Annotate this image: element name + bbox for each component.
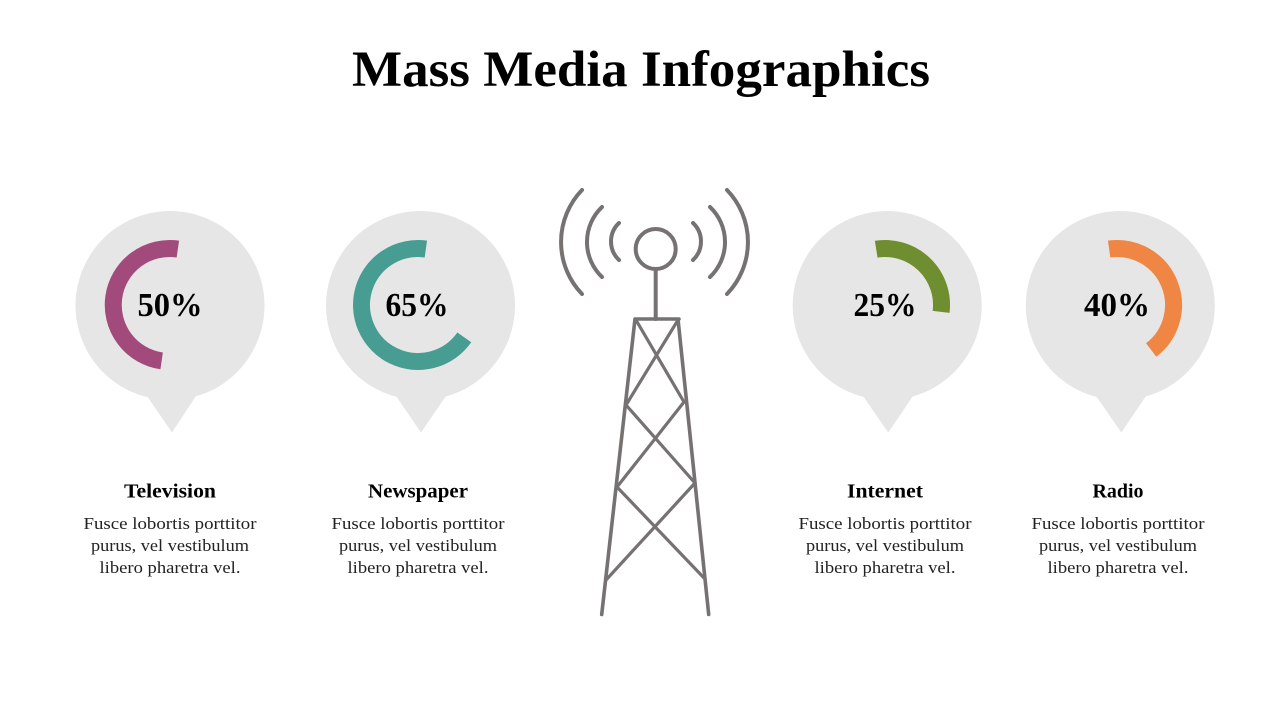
antenna mast — [654, 269, 658, 319]
pin: newspaper — [326, 211, 515, 432]
description: newspaper: purus, vel vestibulum — [339, 536, 497, 555]
donut: television 50% — [113, 248, 178, 361]
heading: television: Television — [124, 480, 217, 502]
description: newspaper: Fusce lobortis porttitor — [332, 514, 505, 533]
signal waves: right — [693, 190, 748, 294]
description: television: libero pharetra vel. — [100, 558, 240, 577]
pin: television — [76, 211, 264, 432]
heading: newspaper: Newspaper — [368, 480, 468, 502]
panel: internet — [793, 211, 982, 577]
panel: newspaper — [326, 211, 515, 577]
description: internet: libero pharetra vel. — [814, 558, 956, 577]
description: newspaper — [332, 514, 505, 577]
donut: internet 25% — [876, 249, 942, 312]
description: radio: Fusce lobortis porttitor — [1032, 514, 1205, 533]
heading: radio: Radio — [1092, 480, 1144, 502]
description: television: Fusce lobortis porttitor — [84, 514, 257, 533]
description: internet: Fusce lobortis porttitor — [798, 514, 972, 533]
value: radio: 40% — [1084, 287, 1150, 324]
signal waves: left — [561, 190, 619, 294]
panel: radio — [1026, 211, 1215, 577]
pin: radio — [1026, 211, 1215, 432]
description: radio — [1032, 514, 1205, 577]
tower lattice — [606, 320, 705, 580]
heading: internet: Internet — [847, 480, 923, 502]
title: Mass Media Infographics — [352, 42, 930, 98]
antenna head — [636, 229, 676, 269]
value: internet: 25% — [854, 287, 916, 324]
icon: broadcast tower — [561, 190, 748, 614]
description: television — [84, 514, 257, 577]
description: radio: purus, vel vestibulum — [1039, 536, 1197, 555]
description: television: purus, vel vestibulum — [91, 536, 249, 555]
description: newspaper: libero pharetra vel. — [348, 558, 488, 577]
description: internet: purus, vel vestibulum — [806, 536, 964, 555]
value: television: 50% — [138, 287, 202, 324]
tower frame — [602, 319, 709, 614]
description: radio: libero pharetra vel. — [1048, 558, 1188, 577]
donut: radio 40% — [1109, 248, 1174, 350]
panel: television — [76, 211, 264, 577]
pin: internet — [793, 211, 982, 432]
donut: newspaper 65% — [362, 249, 464, 362]
description: internet — [798, 514, 972, 577]
value: newspaper: 65% — [386, 287, 448, 324]
